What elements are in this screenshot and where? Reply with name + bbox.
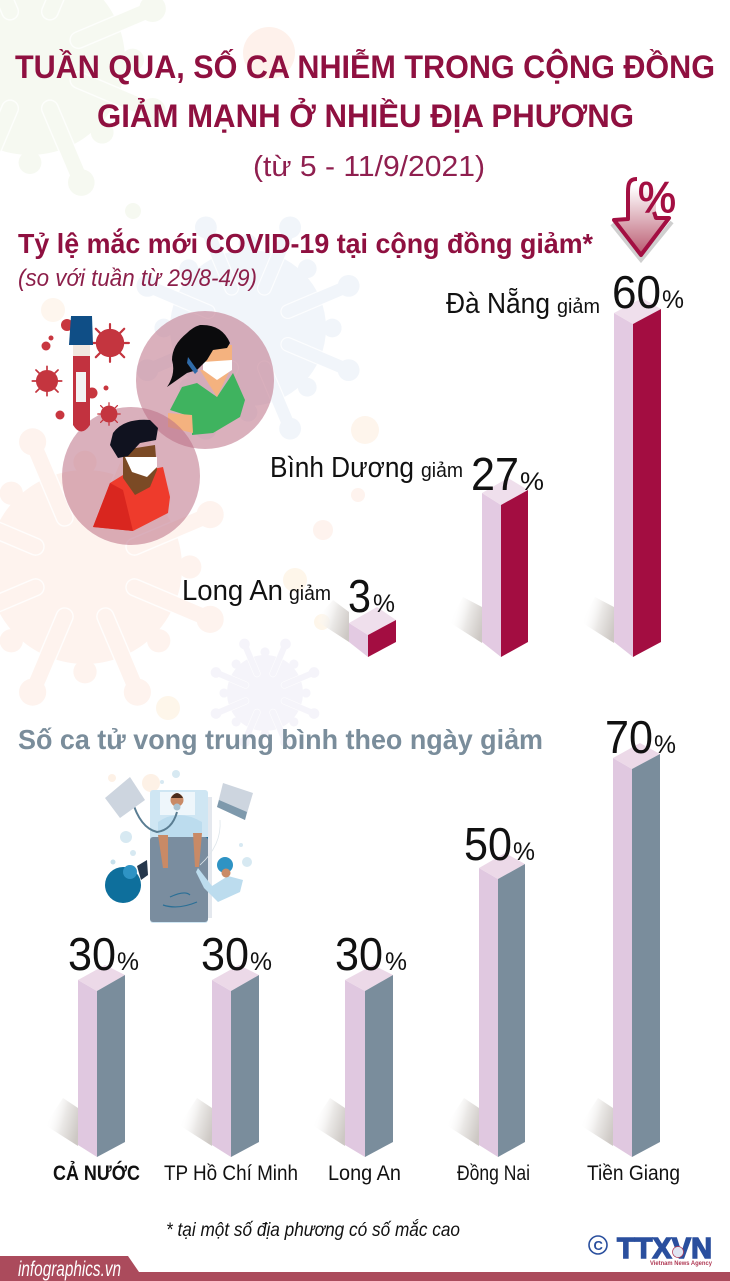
title: GIẢM MẠNH Ở NHIỀU ĐỊA PHƯƠNG — [97, 98, 634, 134]
values: % — [117, 948, 139, 976]
values: 50 — [464, 818, 512, 870]
illustration: man with mask — [62, 407, 200, 545]
bar chart: new infection decline — [182, 266, 684, 657]
values: % — [513, 838, 535, 866]
footer bar — [0, 1256, 730, 1281]
region labels: Tiền Giang — [587, 1162, 680, 1185]
region labels — [53, 1161, 680, 1185]
region labels: TP Hồ Chí Minh — [164, 1162, 298, 1185]
bar: Bình Dương 27% — [449, 478, 528, 657]
footnote: * tại một số địa phương có số mắc cao — [166, 1220, 460, 1241]
title: TUẦN QUA, SỐ CA NHIỄM TRONG CỘNG ĐỒNG — [15, 49, 715, 85]
region labels: CẢ NƯỚC — [53, 1161, 140, 1185]
background virus pattern — [0, 0, 379, 747]
illustration: blood tube and viruses — [32, 316, 129, 432]
label: Đà Nẵng — [446, 266, 684, 320]
label: Long An: 3 — [348, 570, 371, 622]
icon: percent down arrow: % — [638, 173, 676, 222]
logo: TTXVN: Vietnam News Agency — [650, 1260, 712, 1267]
values: 30 — [335, 928, 383, 980]
region labels: Long An — [328, 1162, 401, 1185]
values: % — [250, 948, 272, 976]
heading: average daily deaths: Số ca tử vong trung bình theo ngày giảm — [18, 724, 543, 755]
bar: Đồng Nai 50% — [446, 853, 525, 1157]
bar: Long An 30% — [312, 965, 393, 1157]
subtitle: date range: (từ 5 - 11/9/2021) — [253, 151, 485, 183]
bar chart: death decline — [45, 711, 680, 1185]
values: % — [654, 731, 676, 759]
values: 30 — [201, 928, 249, 980]
title — [15, 49, 715, 134]
bar: Cả nước 30% — [45, 965, 125, 1157]
illustration: woman with mask — [136, 311, 274, 449]
label: Đà Nẵng: % — [662, 286, 684, 314]
label: Bình Dương: 27 — [471, 448, 519, 500]
bar: TP Hồ Chí Minh 30% — [179, 965, 259, 1157]
illustration: hospital bed and medical staff — [105, 770, 253, 923]
bar: Đà Nẵng 60% — [581, 298, 661, 657]
label: Đà Nẵng: 60 — [612, 266, 661, 318]
label: Bình Dương: Bình Dương — [270, 452, 414, 484]
region labels: Đồng Nai — [457, 1162, 530, 1185]
bar: Tiền Giang 70% — [580, 743, 660, 1157]
note: comparison week: (so với tuần từ 29/8-4/9) — [18, 265, 257, 292]
values: 30 — [68, 928, 116, 980]
values: 70 — [605, 711, 653, 763]
label: Long An: Long An — [182, 575, 283, 607]
heading: new infection rate: Tỷ lệ mắc mới COVID-19 tại cộng đồng giảm* — [18, 228, 593, 259]
footer source text: infographics.vn — [18, 1258, 121, 1281]
bar: Long An 3% — [315, 600, 396, 657]
label: Long An: giảm — [289, 583, 331, 605]
label: Đà Nẵng: giảm — [557, 296, 600, 318]
logo: TTXVN: TTXVN — [617, 1233, 712, 1265]
label: Long An: % — [373, 590, 395, 618]
label: Bình Dương: % — [520, 468, 544, 496]
values — [68, 711, 676, 980]
label: Bình Dương — [270, 448, 544, 500]
label: Long An — [182, 570, 395, 622]
icon: percent down arrow — [612, 173, 676, 260]
label: Đà Nẵng: Đà Nẵng — [446, 287, 550, 320]
values: % — [385, 948, 407, 976]
logo: TTXVN: C — [594, 1238, 604, 1253]
label: Bình Dương: giảm — [421, 460, 463, 482]
